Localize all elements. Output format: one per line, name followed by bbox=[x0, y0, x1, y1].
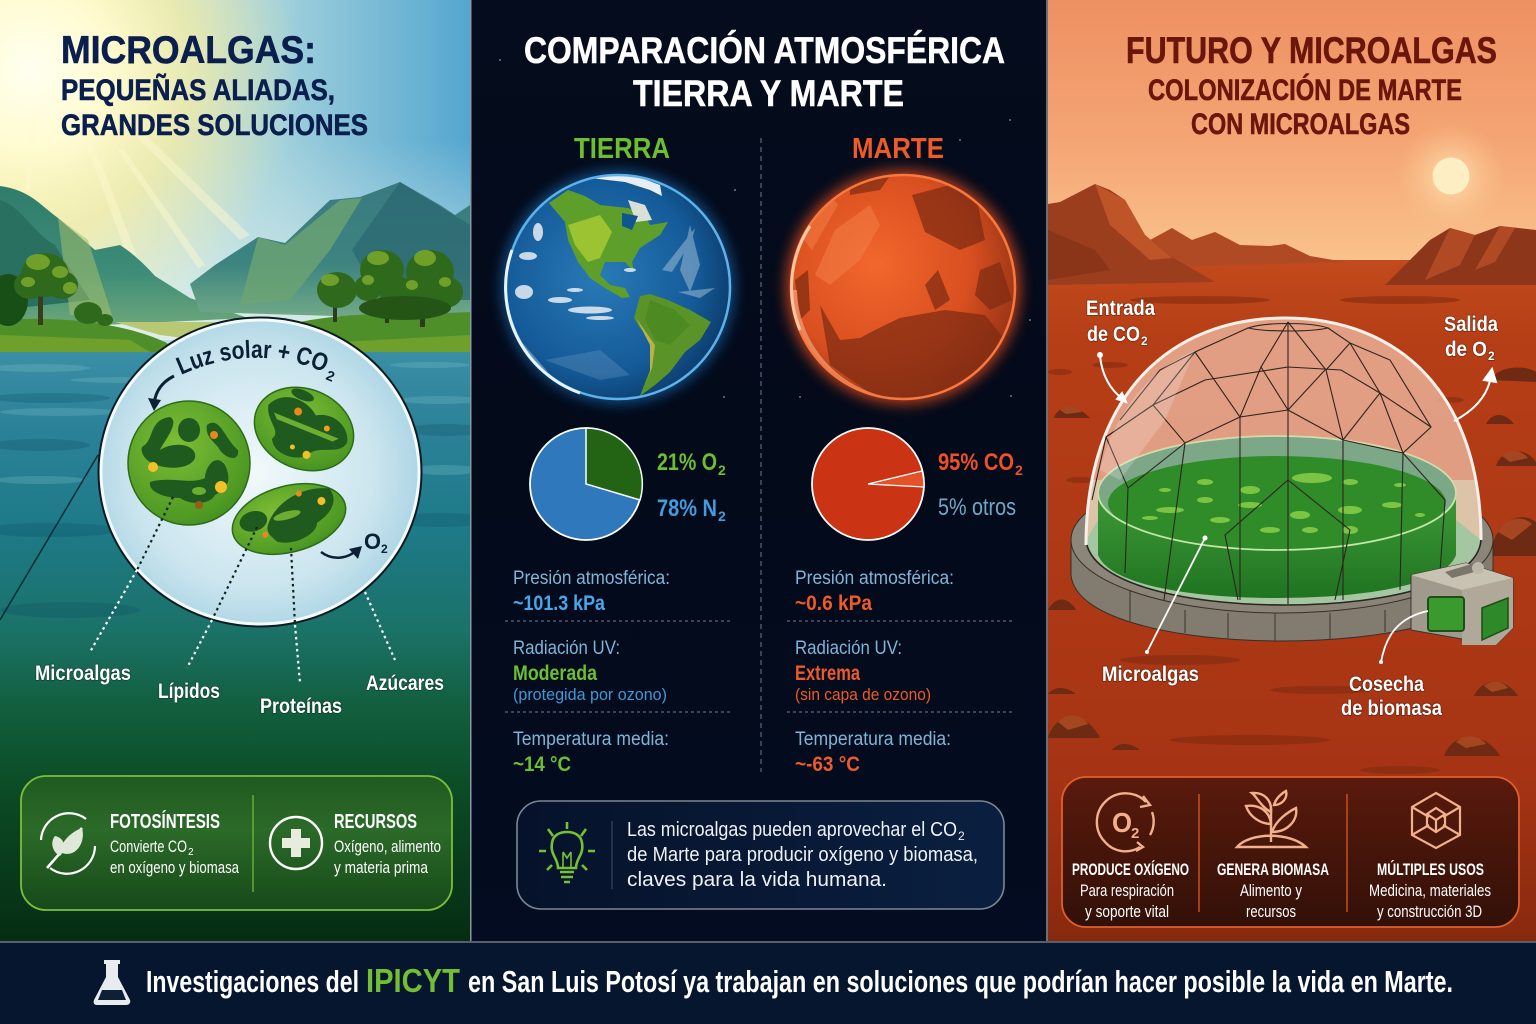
leader: Microalgas bbox=[1145, 536, 1208, 654]
algae cell lower bbox=[224, 472, 354, 566]
stats: Earth: Temperatura media: bbox=[513, 729, 669, 750]
label: O2 bbox=[364, 529, 388, 556]
label: Entrada de CO2: de CO bbox=[1087, 323, 1140, 346]
icon: light bulb bbox=[539, 822, 595, 882]
stats: Mars: Temperatura media: bbox=[795, 729, 951, 750]
dotted leaders bbox=[90, 497, 395, 683]
stats: Mars: ~-63 °C bbox=[795, 753, 860, 776]
legend: Earth gases: 21% O bbox=[657, 449, 717, 476]
title: futuro bbox=[1126, 30, 1497, 141]
arrow: oxygen release bbox=[321, 546, 362, 559]
stats: Earth: ~101.3 kPa bbox=[513, 592, 605, 615]
title: comparación: COMPARACIÓN ATMOSFÉRICA bbox=[524, 29, 1005, 71]
algae tank bbox=[1098, 436, 1456, 598]
stats: Earth: Presión atmosférica: bbox=[513, 568, 670, 589]
stats: Earth bbox=[505, 568, 732, 776]
label: Cosecha de biomasa bbox=[1341, 673, 1442, 720]
legend: Mars gases bbox=[938, 449, 1023, 521]
label: Cosecha de biomasa: de biomasa bbox=[1341, 697, 1442, 720]
arrow: Salida de O2 bbox=[1454, 369, 1496, 421]
text: produce oxígeno: y soporte vital bbox=[1085, 902, 1169, 921]
Martian sky and sun bbox=[1048, 0, 1536, 270]
legend: Mars gases: 95% CO bbox=[938, 449, 1014, 476]
text: genera biomasa: GENERA BIOMASA bbox=[1217, 860, 1329, 879]
text: recursos: y materia prima bbox=[334, 858, 428, 877]
label: Salida de O2: Salida bbox=[1444, 313, 1498, 336]
text: fotosíntesis: Convierte CO bbox=[110, 837, 187, 856]
stats: Mars: Extrema bbox=[795, 662, 860, 685]
Martian mountains bbox=[1048, 184, 1536, 285]
stats: Earth: ~14 °C bbox=[513, 753, 571, 776]
label: Cosecha de biomasa: Cosecha bbox=[1349, 673, 1424, 696]
legend: Earth gases bbox=[657, 449, 726, 524]
footer text: IPICYT bbox=[366, 962, 460, 999]
legend: Earth gases: 2 bbox=[718, 462, 726, 478]
text: callout: 2 bbox=[958, 829, 965, 843]
text: recursos: Oxígeno, alimento bbox=[334, 837, 441, 856]
footer text: Investigaciones del bbox=[146, 964, 359, 999]
title: microalgas bbox=[61, 29, 368, 142]
label: Entrada de CO2: Entrada bbox=[1086, 297, 1155, 320]
text: produce oxígeno: Para respiración bbox=[1080, 881, 1174, 900]
label: Luz solar + CO2: Luz solar + CO bbox=[176, 340, 328, 374]
stats: Mars bbox=[787, 568, 1014, 776]
text: múltiples usos: MÚLTIPLES USOS bbox=[1377, 860, 1484, 879]
icon: sprout bbox=[1237, 791, 1306, 847]
title: microalgas: GRANDES SOLUCIONES bbox=[61, 109, 368, 142]
footer text bbox=[146, 962, 1453, 999]
foundation ring bbox=[1071, 467, 1493, 641]
legend: Mars gases: 2 bbox=[1015, 462, 1023, 478]
label: Entrada de CO2: 2 bbox=[1141, 334, 1148, 348]
icon: leaf cycle bbox=[41, 813, 95, 874]
icon: flask bbox=[94, 960, 130, 1005]
info box: beneficios bbox=[1062, 777, 1519, 927]
planet: Mars bbox=[786, 170, 1020, 405]
algae cell large bbox=[128, 401, 250, 525]
label: Lípidos: Lípidos bbox=[158, 680, 220, 703]
glass dome with lattice bbox=[1086, 317, 1481, 604]
info box: fotosíntesis y recursos bbox=[21, 776, 452, 910]
stats: Earth: Radiación UV: bbox=[513, 638, 620, 659]
trees and river bank bbox=[0, 250, 470, 352]
title: comparación: TIERRA Y MARTE bbox=[633, 73, 904, 114]
text: callout: claves para la vida humana. bbox=[627, 869, 887, 891]
stats: Earth: (protegida por ozono) bbox=[513, 685, 667, 704]
label: Salida de O2: de O bbox=[1445, 338, 1487, 361]
leader: Cosecha bbox=[1379, 611, 1428, 664]
text: genera biomasa bbox=[1217, 860, 1329, 921]
mountains bbox=[0, 182, 470, 330]
label: O2: O bbox=[364, 529, 381, 554]
text: múltiples usos: y construcción 3D bbox=[1377, 902, 1482, 921]
icon: plus bbox=[270, 817, 322, 869]
pie chart: Earth atmosphere bbox=[530, 428, 642, 540]
legend: Earth gases: 78% N bbox=[657, 495, 717, 522]
text: múltiples usos bbox=[1369, 860, 1491, 921]
text: recursos bbox=[334, 811, 441, 877]
heading: Tierra: TIERRA bbox=[574, 133, 670, 165]
Martian rocks bbox=[1048, 296, 1536, 774]
panel: futuro y microalgas bbox=[1048, 0, 1536, 942]
title: futuro: CON MICROALGAS bbox=[1191, 108, 1410, 141]
callout: CO2 de Marte bbox=[517, 801, 1004, 909]
label: Microalgas: Microalgas bbox=[35, 662, 131, 685]
label: Entrada de CO2 bbox=[1086, 297, 1155, 348]
text: fotosíntesis: 2 bbox=[188, 847, 194, 858]
title: comparación bbox=[524, 29, 1005, 114]
title: microalgas: MICROALGAS: bbox=[61, 29, 316, 72]
arrow: light into cell bbox=[148, 376, 174, 411]
panel: comparación atmosférica bbox=[470, 0, 1048, 942]
label: Salida de O2 bbox=[1444, 313, 1498, 363]
icon: oxygen cycle: 2 bbox=[1131, 825, 1139, 842]
icon: oxygen cycle bbox=[1097, 793, 1154, 851]
magnified algae circle bbox=[98, 316, 422, 628]
algae cell upper right bbox=[242, 373, 366, 485]
arrow: Entrada de CO2 bbox=[1098, 353, 1126, 402]
title: futuro: COLONIZACIÓN DE MARTE bbox=[1148, 73, 1462, 107]
label: Microalgas: Microalgas bbox=[1102, 663, 1199, 686]
text: genera biomasa: recursos bbox=[1246, 902, 1296, 921]
icon: oxygen cycle: O bbox=[1112, 807, 1132, 838]
title: microalgas: PEQUEÑAS ALIADAS, bbox=[61, 73, 335, 107]
label: Salida de O2: 2 bbox=[1488, 349, 1495, 363]
stats: Mars: Radiación UV: bbox=[795, 638, 902, 659]
text: callout bbox=[627, 819, 978, 891]
heading: Marte: MARTE bbox=[852, 133, 944, 165]
text: fotosíntesis: FOTOSÍNTESIS bbox=[110, 810, 220, 833]
Martian ground bbox=[1048, 260, 1536, 942]
text: produce oxígeno: PRODUCE OXÍGENO bbox=[1072, 860, 1189, 879]
stats: Earth: Moderada bbox=[513, 662, 597, 685]
text: callout: de Marte para producir oxígeno y biomasa, bbox=[627, 844, 978, 866]
label: Azúcares: Azúcares bbox=[366, 672, 444, 695]
biodome habitat bbox=[1071, 317, 1513, 645]
label: Proteínas: Proteínas bbox=[260, 695, 342, 718]
legend: Earth gases: 2 bbox=[718, 508, 726, 524]
planet: Earth bbox=[500, 171, 734, 405]
footer banner bbox=[0, 941, 1536, 1024]
harvest module bbox=[1411, 562, 1513, 645]
pie chart: Mars atmosphere bbox=[812, 428, 924, 540]
text: produce oxígeno bbox=[1072, 860, 1189, 921]
stats: Mars: Presión atmosférica: bbox=[795, 568, 954, 589]
stats: Mars: ~0.6 kPa bbox=[795, 592, 872, 615]
text: fotosíntesis bbox=[110, 810, 239, 877]
text: callout: Las microalgas pueden aprovechar el CO bbox=[627, 819, 957, 841]
text: fotosíntesis: en oxígeno y biomasa bbox=[110, 858, 239, 877]
sky and sun bbox=[0, 0, 470, 360]
label: O2: 2 bbox=[381, 542, 388, 556]
icon: 3D cube bbox=[1412, 793, 1460, 848]
stats: Mars: (sin capa de ozono) bbox=[795, 685, 931, 704]
text: recursos: RECURSOS bbox=[334, 811, 417, 833]
panel: microalgas bbox=[0, 0, 470, 941]
legend: Mars gases: 5% otros bbox=[938, 494, 1016, 521]
river water bbox=[0, 352, 485, 942]
label: Luz solar + CO2: 2 bbox=[324, 367, 337, 385]
text: múltiples usos: Medicina, materiales bbox=[1369, 881, 1491, 900]
text: genera biomasa: Alimento y bbox=[1240, 881, 1302, 900]
